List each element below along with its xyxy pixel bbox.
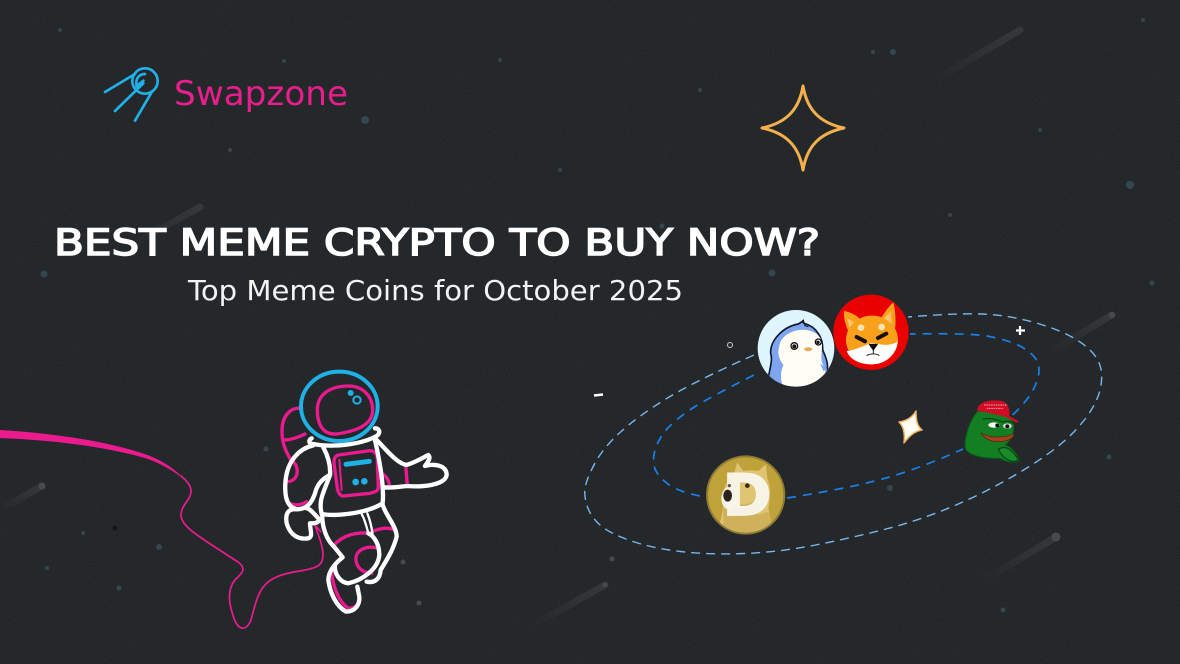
penguin body xyxy=(768,321,828,387)
pepe face xyxy=(981,419,1014,442)
shiba head xyxy=(846,316,898,364)
coin: Pepe xyxy=(965,400,1019,462)
doge face xyxy=(723,483,750,502)
astronaut chest display xyxy=(346,461,369,485)
coin: Shiba Inu xyxy=(833,295,909,370)
astronaut white outline xyxy=(285,428,447,612)
pepe hat xyxy=(977,400,1019,423)
astronaut pink details xyxy=(282,408,407,608)
pink tether line xyxy=(0,430,323,628)
pepe body xyxy=(965,410,1019,462)
logo wordmark: Swapzone xyxy=(174,74,348,114)
penguin face xyxy=(791,320,821,351)
orbit: inner dashed ring xyxy=(654,334,1039,498)
astronaut helmet xyxy=(301,372,378,441)
doge muzzle xyxy=(721,487,737,510)
shiba face xyxy=(857,324,886,356)
penguin belly xyxy=(778,330,827,392)
pepe hand xyxy=(998,448,1018,461)
title: BEST MEME CRYPTO TO BUY NOW? xyxy=(54,221,820,264)
shiba ears xyxy=(844,311,862,335)
icon: white sparkle star xyxy=(899,411,922,443)
small markers xyxy=(594,326,1025,396)
astronaut xyxy=(282,372,447,612)
doge silhouette xyxy=(720,462,771,533)
doge D mark: D xyxy=(723,462,771,529)
logo: Swapzone xyxy=(105,68,348,121)
icon: gold four-point star xyxy=(762,86,844,170)
icon: satellite xyxy=(105,68,158,121)
coin: Dogecoin xyxy=(707,456,784,535)
subtitle: Top Meme Coins for October 2025 xyxy=(187,274,683,307)
coin: Pudgy Penguins xyxy=(758,310,834,392)
orbit: outer dashed ring xyxy=(585,314,1102,554)
